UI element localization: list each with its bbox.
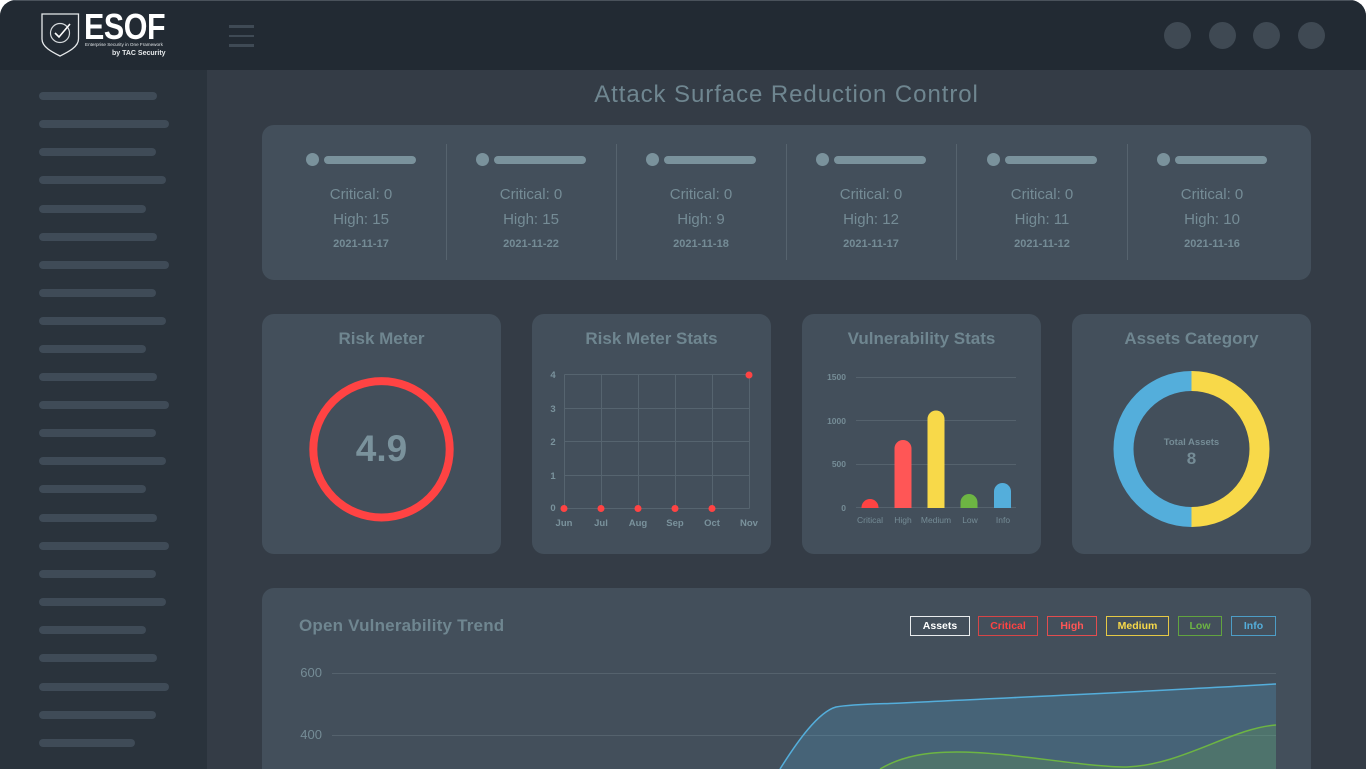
- summary item 6: Critical: 0: [1181, 186, 1243, 203]
- summary item 4: High: 12: [843, 211, 899, 228]
- bar chart: vulnerabilities by severity: 500: [832, 459, 846, 469]
- line chart: risk by month: 1: [550, 471, 556, 482]
- bar chart: vulnerabilities by severity: High: [894, 515, 912, 525]
- low series: [880, 725, 1276, 769]
- summary item 1: High: 15: [333, 211, 389, 228]
- heading: vulnerability stats: Vulnerability Stats: [848, 329, 995, 348]
- bar chart: vulnerabilities by severity: 1500: [827, 372, 846, 382]
- sidebar navigation: [0, 70, 207, 769]
- bar chart: vulnerabilities by severity: 1000: [827, 416, 846, 426]
- heading: risk meter: Risk Meter: [338, 329, 424, 348]
- icon: hamburger menu: [229, 25, 254, 47]
- summary item 1: Critical: 0: [330, 186, 392, 203]
- summary item 2: Critical: 0: [500, 186, 562, 203]
- summary item 5: 2021-11-12: [1014, 238, 1070, 250]
- logo: ESOF: [41, 6, 166, 57]
- bar chart: vulnerabilities by severity: Medium: [921, 515, 951, 525]
- summary item 5: High: 11: [1015, 211, 1069, 228]
- summary item 1: [306, 153, 416, 250]
- bar chart: vulnerabilities by severity: Low: [962, 515, 979, 525]
- line chart: risk by month: Sep: [666, 518, 684, 529]
- legend: critical: Critical: [990, 620, 1026, 632]
- summary item 3: [646, 153, 756, 250]
- heading: risk meter stats: Risk Meter Stats: [585, 329, 718, 348]
- panel: risk meter: [262, 314, 501, 554]
- gauge: risk score ring: 4.9: [356, 428, 407, 469]
- line chart: risk by month: Jul: [594, 518, 608, 529]
- summary item 6: [1157, 153, 1267, 250]
- summary item 2: 2021-11-22: [503, 238, 559, 250]
- line chart: risk by month: 4: [550, 370, 556, 381]
- summary item 5: [987, 153, 1097, 250]
- area chart: vulnerability trend: 400: [300, 727, 322, 742]
- legend: assets: Assets: [923, 620, 957, 632]
- donut chart: total assets: [1114, 371, 1270, 527]
- summary item 6: 2021-11-16: [1184, 238, 1240, 250]
- icon: shield with check: [41, 13, 80, 57]
- line chart: risk by month: Nov: [740, 518, 759, 529]
- donut chart: total assets: 8: [1187, 449, 1196, 468]
- header bar: [0, 0, 1366, 70]
- panel: risk meter stats: [532, 314, 771, 554]
- legend: high: High: [1060, 620, 1084, 632]
- summary item 3: 2021-11-18: [673, 238, 729, 250]
- heading: assets category: Assets Category: [1124, 329, 1259, 348]
- bar chart: vulnerabilities by severity: 0: [841, 503, 846, 513]
- line chart: risk by month: Oct: [704, 518, 721, 529]
- line chart: risk by month: Jun: [556, 518, 573, 529]
- bar chart: vulnerabilities by severity: [827, 372, 1016, 525]
- line chart: risk by month: Aug: [629, 518, 647, 529]
- line chart: risk by month: 3: [550, 404, 556, 415]
- legend: info: Info: [1244, 620, 1263, 632]
- area chart: vulnerability trend: 600: [300, 665, 322, 680]
- legend: critical: [978, 616, 1038, 636]
- info series: [780, 684, 1276, 769]
- bar chart: vulnerabilities by severity: Info: [996, 515, 1010, 525]
- legend: medium: Medium: [1118, 620, 1157, 632]
- heading: open vulnerability trend: Open Vulnerability Trend: [299, 616, 504, 635]
- gauge: risk score ring: [309, 377, 454, 522]
- legend: high: [1047, 616, 1097, 636]
- legend: assets: [910, 616, 970, 636]
- summary item 5: Critical: 0: [1011, 186, 1073, 203]
- panel: open vulnerability trend: [262, 588, 1311, 769]
- summary item 3: Critical: 0: [670, 186, 732, 203]
- panel: summary strip: [262, 125, 1311, 280]
- legend: low: [1178, 616, 1222, 636]
- area chart: vulnerability trend: [300, 665, 1276, 769]
- legend: medium: [1106, 616, 1169, 636]
- logo byline: by TAC Security: [112, 50, 166, 57]
- summary item 4: Critical: 0: [840, 186, 902, 203]
- panel: assets category: [1072, 314, 1311, 554]
- page title: Attack Surface Reduction Control: [594, 81, 979, 108]
- line chart: risk by month: [550, 370, 759, 529]
- summary item 6: High: 10: [1184, 211, 1240, 228]
- legend: low: Low: [1190, 620, 1210, 632]
- header action icons: [1164, 22, 1325, 49]
- summary item 4: [816, 153, 926, 250]
- summary item 1: 2021-11-17: [333, 238, 389, 250]
- donut chart: total assets: Total Assets: [1164, 437, 1219, 448]
- summary item 3: High: 9: [677, 211, 725, 228]
- summary item 2: [476, 153, 586, 250]
- line chart: risk by month: 2: [550, 437, 556, 448]
- panel: vulnerability stats: [802, 314, 1041, 554]
- summary item 2: High: 15: [503, 211, 559, 228]
- summary item 4: 2021-11-17: [843, 238, 899, 250]
- logo tagline: Enterprise Security in One Framework: [85, 42, 163, 47]
- logo wordmark: ESOF: [84, 6, 165, 47]
- bar chart: vulnerabilities by severity: Critical: [857, 515, 883, 525]
- legend: info: [1231, 616, 1276, 636]
- line chart: risk by month: 0: [550, 503, 556, 514]
